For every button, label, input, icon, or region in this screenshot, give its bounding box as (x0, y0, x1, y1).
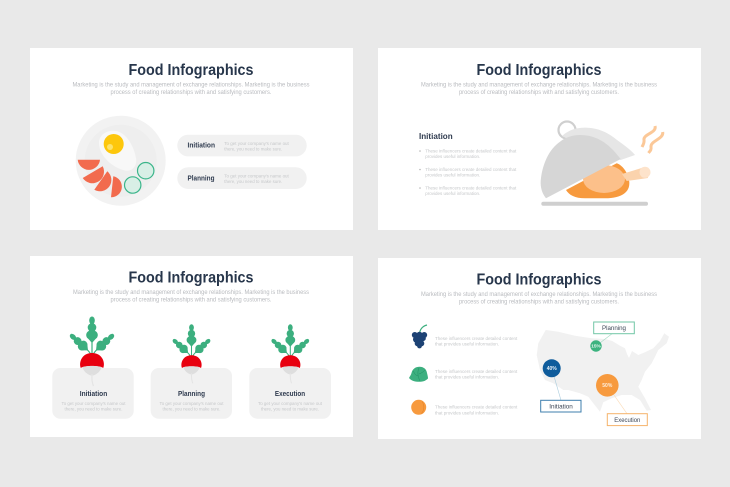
icon: grapes (412, 325, 427, 348)
text: grapes (435, 336, 518, 348)
bullet list: provides useful information. (425, 173, 480, 179)
card: Planning: there, you need to make sure. (162, 406, 220, 412)
icon: cabbage (409, 367, 428, 382)
callout: Initiation 40%: Initiation (549, 403, 573, 410)
pill: Planning: To get your company's name out (224, 174, 289, 180)
card: Planning: Planning (178, 389, 205, 398)
callout: Initiation 40%: 40% (547, 366, 557, 372)
subtitle: process of creating relationships with and satisfying customers. (110, 296, 272, 304)
subtitle: Marketing is the study and management of exchange relationships. Marketing is the business (421, 82, 658, 88)
pill: Initiation: To get your company's name out (224, 141, 289, 147)
subtitle: Marketing is the study and management of exchange relationships. Marketing is the business (421, 291, 658, 298)
title: Food Infographics (476, 272, 602, 288)
subtitle (73, 289, 310, 304)
card: Planning: To get your company's name out (160, 401, 224, 407)
card: Initiation: Initiation (80, 389, 107, 398)
bullet list: provides useful information. (425, 191, 480, 197)
pill: Initiation: there, you need to make sure. (224, 146, 282, 152)
subtitle (421, 82, 658, 96)
title: Food Infographics (128, 270, 254, 286)
text: grapes: that provides useful information. (435, 342, 499, 348)
bullet list: provides useful information. (425, 154, 480, 160)
subtitle: Marketing is the study and management of exchange relationships. Marketing is the business (72, 82, 310, 88)
callout: Initiation 40% (541, 359, 581, 412)
card: Initiation (52, 316, 134, 419)
text: cabbage: that provides useful information. (435, 375, 499, 381)
pill: Planning: Planning (188, 174, 214, 182)
text: grapes: These influencers create detailed content (435, 336, 518, 342)
icon: plate with egg, tomato and cucumber (76, 116, 166, 206)
subtitle (421, 291, 658, 306)
bullet list: These influencers create detailed content that (425, 186, 517, 192)
callout: Execution 50%: 50% (602, 383, 613, 389)
panel: radish slide (30, 256, 353, 437)
callout: Execution 50%: Execution (614, 417, 641, 424)
card: Execution (249, 324, 331, 419)
pill: Planning: there, you need to make sure. (224, 179, 282, 185)
text: orange (435, 405, 518, 416)
card: Execution: there, you need to make sure. (261, 406, 319, 412)
bullet list: These influencers create detailed content that (425, 167, 517, 173)
callout: Planning 15%: 15% (591, 344, 602, 350)
card: Execution: Execution (275, 389, 305, 398)
bullet list: These influencers create detailed content that (425, 148, 517, 154)
icon: orange (411, 400, 426, 415)
panel: map slide (378, 258, 701, 439)
text: cabbage: These influencers create detailed content (435, 369, 518, 375)
callout: Planning 15% (590, 322, 634, 352)
subtitle (72, 82, 310, 96)
title: Food Infographics (476, 62, 602, 79)
heading: Initiation: Initiation (419, 131, 453, 141)
panel: cloche slide (378, 48, 701, 230)
text: orange: These influencers create detailed content (435, 405, 518, 411)
title: Food Infographics (128, 62, 254, 79)
subtitle: process of creating relationships with and satisfying customers. (459, 89, 619, 96)
card: Planning (151, 324, 232, 419)
pill: Planning (177, 167, 307, 189)
subtitle: Marketing is the study and management of exchange relationships. Marketing is the business (73, 289, 310, 296)
callout: Execution 50% (596, 374, 647, 426)
map: United States (537, 330, 669, 412)
card: Initiation: there, you need to make sure. (64, 406, 122, 412)
card: Initiation: To get your company's name out (62, 401, 126, 407)
subtitle: process of creating relationships with and satisfying customers. (459, 298, 619, 306)
subtitle: process of creating relationships with and satisfying customers. (110, 89, 272, 96)
text: orange: that provides useful information. (435, 410, 499, 416)
icon: cloche over roast chicken (541, 122, 663, 206)
bullet list (419, 148, 517, 197)
pill: Initiation: Initiation (188, 140, 215, 150)
text: cabbage (435, 369, 518, 381)
card: Execution: To get your company's name out (258, 401, 323, 407)
panel: plate slide (30, 48, 353, 230)
pill: Initiation (177, 135, 307, 156)
callout: Planning 15%: Planning (602, 325, 627, 332)
